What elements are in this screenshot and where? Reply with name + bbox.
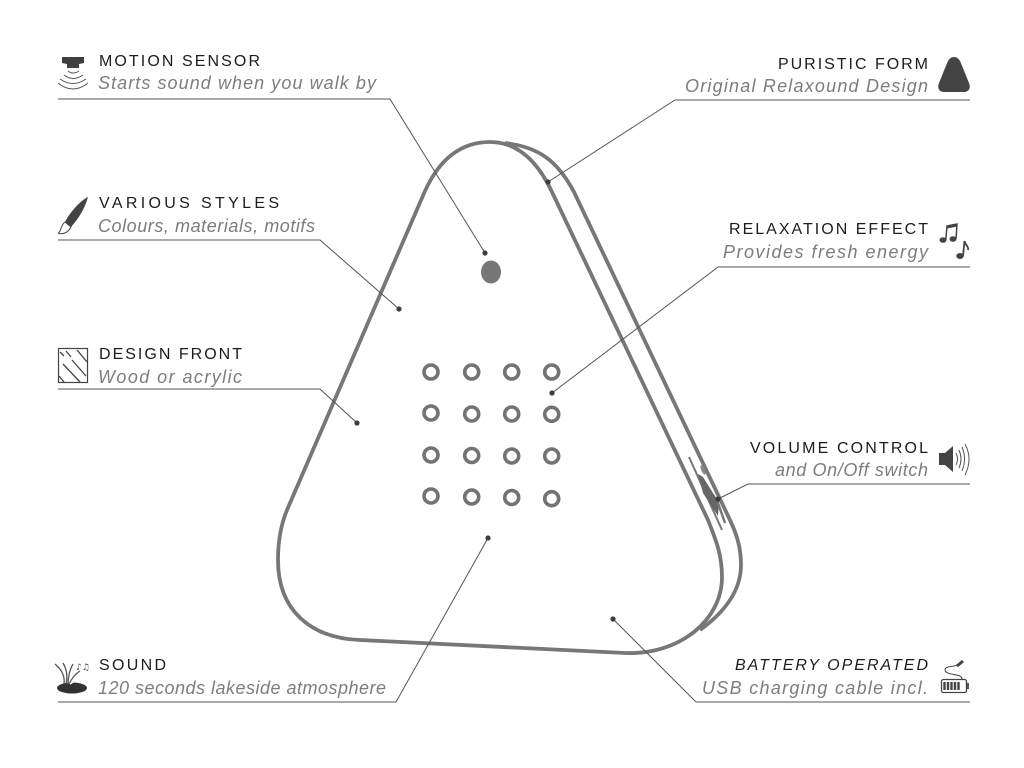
callout: various styles xyxy=(58,195,402,312)
callout: puristic form: PURISTIC FORM xyxy=(778,56,928,73)
callout: design front: DESIGN FRONT xyxy=(99,346,242,363)
icon: paint brush xyxy=(58,197,88,234)
callout: relaxation effect xyxy=(549,221,970,396)
icon: lake with reeds and notes: ♪♫ xyxy=(76,663,90,673)
callout: puristic form: Original Relaxound Design xyxy=(685,76,928,96)
icon: hatched square xyxy=(58,348,88,382)
volume control on device side xyxy=(689,457,725,530)
callout: various styles: Colours, materials, motifs xyxy=(98,216,315,236)
icon: solid triangle xyxy=(938,57,970,92)
callout: relaxation effect: Provides fresh energy xyxy=(723,242,929,262)
speaker holes grid xyxy=(424,365,559,506)
motion sensor window xyxy=(481,260,501,284)
callout: battery operated: BATTERY OPERATED xyxy=(735,657,928,674)
callout: battery operated xyxy=(610,616,970,702)
icon: lake with reeds and notes xyxy=(55,663,90,694)
icon: speaker xyxy=(939,444,969,475)
callout: various styles: VARIOUS STYLES xyxy=(99,195,279,212)
callout: sound: SOUND xyxy=(99,657,166,674)
callout: volume control: VOLUME CONTROL xyxy=(750,440,928,457)
callout: sound xyxy=(55,535,491,702)
icon: battery with usb cable xyxy=(942,661,968,692)
callout: sound: 120 seconds lakeside atmosphere xyxy=(98,678,386,698)
product outline: triangular speaker xyxy=(278,142,741,653)
icon: music notes xyxy=(940,224,968,259)
callout: motion sensor: MOTION SENSOR xyxy=(99,53,260,70)
callout: relaxation effect: RELAXATION EFFECT xyxy=(729,221,928,238)
callout: volume control: and On/Off switch xyxy=(775,460,928,480)
callout: design front: Wood or acrylic xyxy=(98,367,242,387)
icon: motion sensor xyxy=(58,57,88,89)
callout: motion sensor: Starts sound when you walk by xyxy=(98,73,377,93)
callout: volume control xyxy=(715,440,970,502)
callout: battery operated: USB charging cable incl. xyxy=(702,678,928,698)
callout: design front xyxy=(58,346,360,426)
callout: puristic form xyxy=(545,56,970,185)
callout: motion sensor xyxy=(58,53,488,256)
